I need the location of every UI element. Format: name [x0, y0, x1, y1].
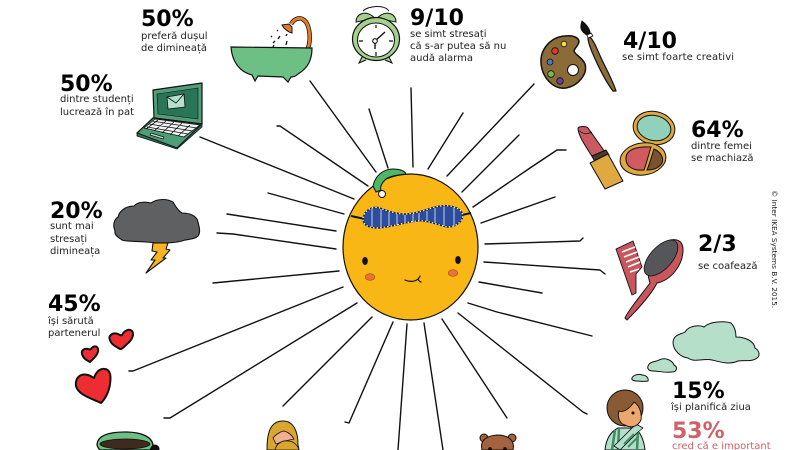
icon: lipstick	[578, 126, 623, 189]
stat: students: lucrează în pat	[60, 106, 134, 118]
stat: plan the day	[670, 379, 751, 413]
icon: comb and hairbrush	[616, 234, 684, 320]
stat: hair	[698, 232, 757, 272]
stat: students: dintre studenți	[60, 94, 134, 105]
stat: creativity	[622, 29, 734, 63]
stat: alarm: că s-ar putea să nu	[410, 41, 506, 52]
icon: alarm clock	[352, 6, 400, 63]
stat: creativity: 4/10	[623, 29, 677, 54]
sleep mask	[351, 206, 471, 228]
leaf	[373, 169, 406, 198]
icon: storm cloud	[114, 200, 200, 273]
icon: coffee cup	[97, 432, 159, 450]
stat: makeup: se machiază	[691, 153, 754, 164]
icon: makeup compact	[618, 107, 678, 178]
stat: stress in the morning: 20%	[50, 199, 103, 224]
sun character	[343, 169, 478, 320]
sun face	[343, 174, 478, 320]
stat: kiss: își sărută	[47, 315, 94, 327]
icon: hearts	[76, 330, 133, 403]
stat: makeup	[691, 118, 754, 164]
stat: shower	[141, 7, 208, 54]
stat: shower: preferă dușul	[141, 31, 208, 42]
icon: thinking person	[605, 390, 645, 450]
stat: students	[60, 72, 134, 118]
stat: stress in the morning: stresați	[50, 234, 87, 245]
stat: makeup: dintre femei	[691, 141, 752, 152]
stat: hair: 2/3	[698, 232, 737, 257]
stat: stress in the morning: dimineața	[50, 246, 100, 257]
cheeks	[365, 270, 458, 280]
stat: alarm: 9/10	[410, 6, 464, 31]
stat: plan the day: 15%	[672, 379, 725, 404]
stat: shower: 50%	[141, 7, 194, 32]
icon: girl with blond hair	[267, 421, 299, 450]
stat: kiss	[47, 292, 101, 339]
copyright: © Inter IKEA Systems B.V. 2015.	[770, 190, 779, 308]
sun rays	[129, 81, 605, 450]
icon: teddy bear	[480, 434, 516, 450]
stat: makeup: 64%	[691, 118, 744, 143]
stat: plan the day: își planifică ziua	[670, 401, 751, 413]
eyes	[362, 256, 461, 265]
stat: kiss: partenerul	[48, 328, 100, 339]
stat: alarm: se simt stresați	[410, 29, 487, 40]
stat: hair: se coafează	[698, 261, 757, 272]
stat: alarm	[410, 6, 506, 64]
stat: shower: de dimineață	[141, 43, 207, 54]
icon: laptop	[137, 83, 202, 149]
stat: stress in the morning	[50, 199, 103, 257]
stat: important: 53%	[672, 419, 725, 444]
icon: bathtub with shower	[231, 18, 312, 82]
stat: important	[672, 419, 771, 450]
stat: alarm: audă alarma	[410, 53, 473, 64]
icon: palette and brush	[541, 21, 616, 91]
icon: thought clouds	[632, 322, 759, 381]
stat: creativity: se simt foarte creativi	[622, 52, 734, 63]
stat: kiss: 45%	[48, 292, 101, 317]
mouth	[405, 276, 421, 282]
stat: stress in the morning: sunt mai	[50, 221, 94, 232]
stat: students: 50%	[60, 72, 113, 97]
